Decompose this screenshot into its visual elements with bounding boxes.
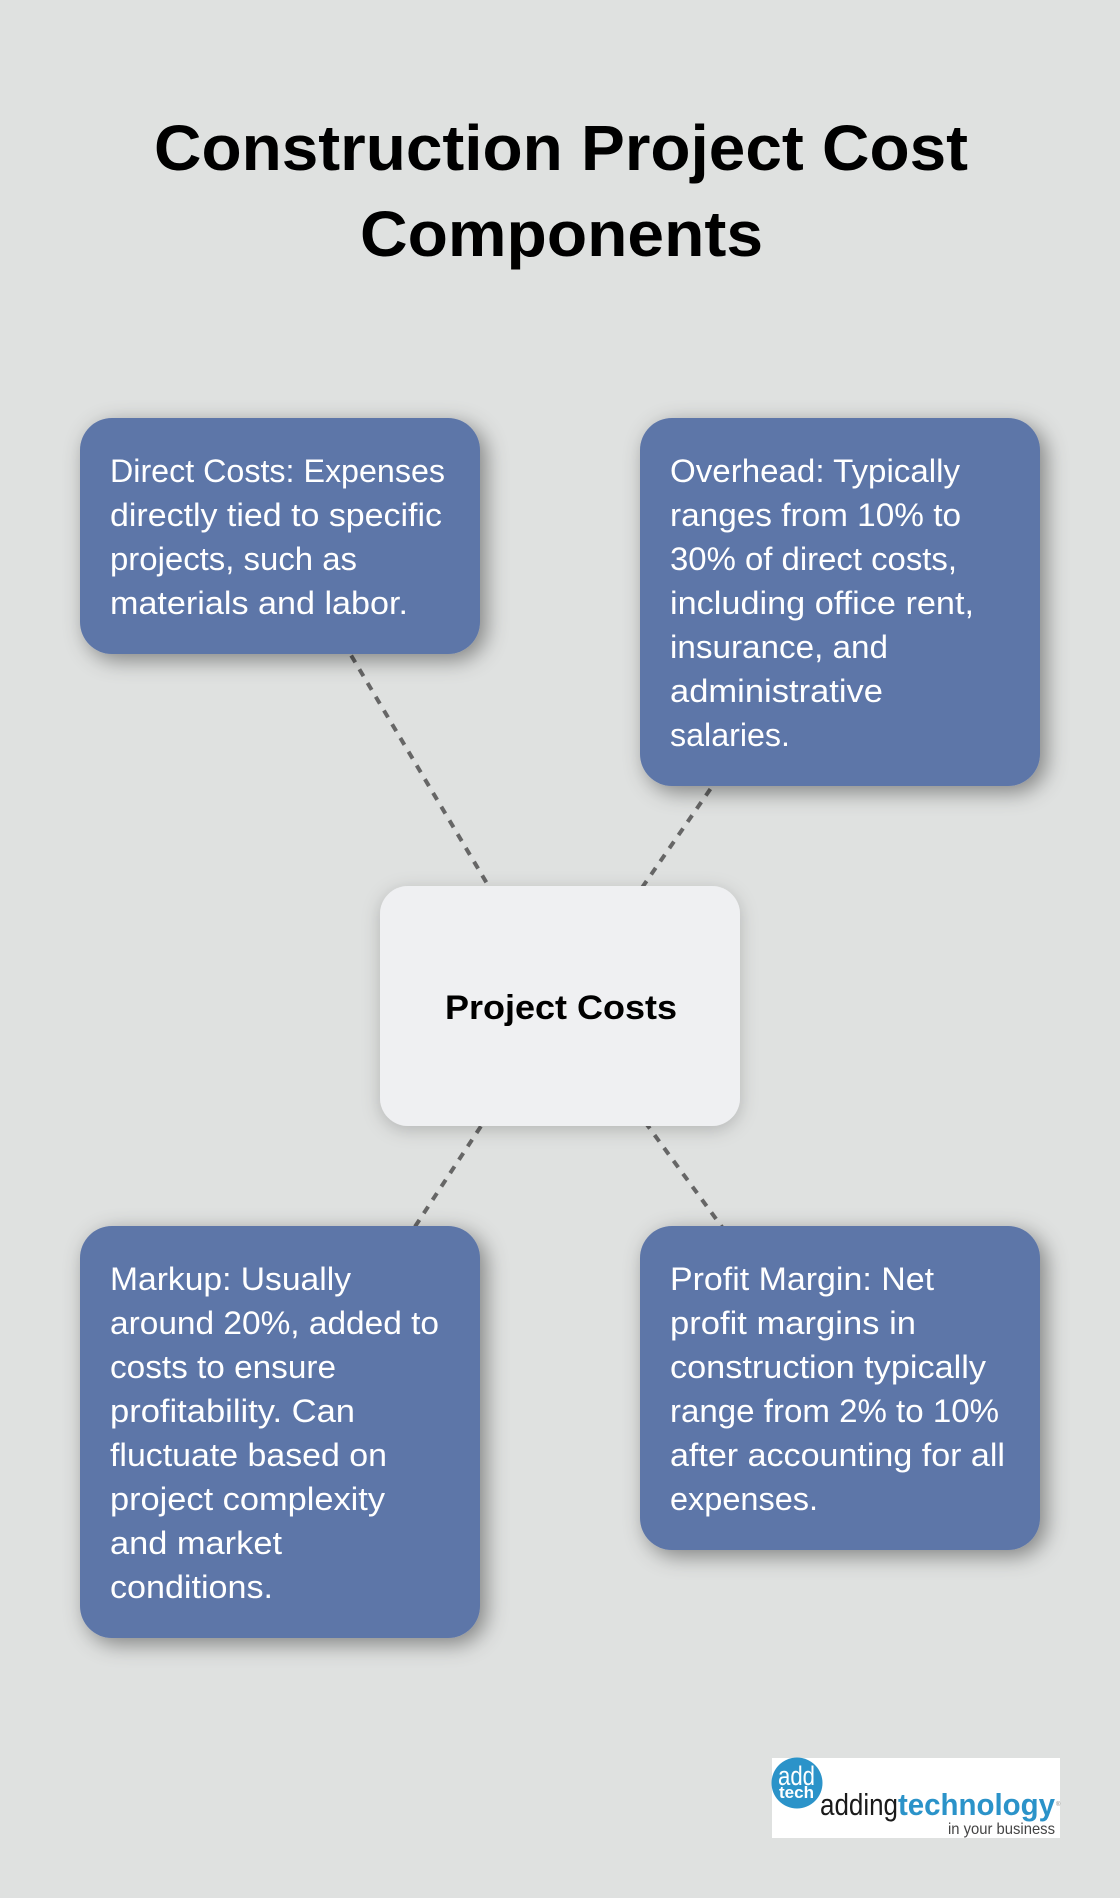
logo icon: add tech circle: add: [778, 1761, 815, 1791]
text: overhead description: salaries.: [670, 717, 790, 753]
text: overhead description: [670, 453, 974, 753]
text: direct costs description: materials and labor.: [110, 585, 408, 621]
title: Components: [360, 198, 763, 270]
logo icon: add tech circle: tech: [779, 1783, 814, 1802]
text: profit margin description: after accounting for all: [670, 1437, 1005, 1473]
panel: direct costs: [80, 418, 480, 654]
text: markup description: conditions.: [110, 1569, 273, 1605]
text: markup description: costs to ensure: [110, 1349, 336, 1385]
text: overhead description: including office rent,: [670, 585, 974, 621]
panel: overhead: [640, 418, 1040, 786]
text: markup description: Markup: Usually: [110, 1261, 351, 1297]
text: profit margin description: construction typically: [670, 1349, 986, 1385]
logo wordmark: adding: [820, 1787, 898, 1822]
text: markup description: fluctuate based on: [110, 1437, 387, 1473]
text: markup description: around 20%, added to: [110, 1305, 439, 1341]
center label: Project Costs: [445, 989, 677, 1027]
text: direct costs description: Direct Costs: Expenses: [110, 453, 445, 489]
text: overhead description: 30% of direct costs,: [670, 541, 957, 577]
panel: markup: [80, 1226, 480, 1638]
logo tagline: in your business: [948, 1821, 1055, 1838]
logo wordmark: ®: [1056, 1801, 1061, 1808]
text: direct costs description: directly tied to specific: [110, 497, 442, 533]
text: profit margin description: range from 2% to 10%: [670, 1393, 999, 1429]
logo: adding technology: [772, 1758, 1061, 1838]
logo icon: add tech circle: [772, 1758, 822, 1808]
text: overhead description: ranges from 10% to: [670, 497, 961, 533]
text: markup description: project complexity: [110, 1481, 385, 1517]
text: profit margin description: expenses.: [670, 1481, 818, 1517]
logo wordmark: [820, 1787, 1061, 1822]
text: profit margin description: Profit Margin: Net: [670, 1261, 934, 1297]
title: [154, 112, 968, 270]
connector: center to profit margin: [560, 1006, 840, 1388]
text: overhead description: Overhead: Typically: [670, 453, 960, 489]
panel: profit margin: [640, 1226, 1040, 1550]
text: profit margin description: profit margins in: [670, 1305, 916, 1341]
connector: center to overhead: [560, 602, 840, 1006]
text: direct costs description: projects, such as: [110, 541, 357, 577]
text: markup description: and market: [110, 1525, 282, 1561]
logo wordmark: technology: [898, 1787, 1056, 1822]
text: overhead description: administrative: [670, 673, 883, 709]
panel: center project costs: [380, 886, 740, 1126]
connector: center to markup: [280, 1006, 560, 1432]
text: markup description: [110, 1261, 439, 1605]
connector: center to direct costs: [280, 536, 560, 1006]
text: profit margin description: [670, 1261, 1005, 1517]
text: direct costs description: [110, 453, 445, 621]
text: overhead description: insurance, and: [670, 629, 888, 665]
title: Construction Project Cost: [154, 112, 968, 184]
text: markup description: profitability. Can: [110, 1393, 355, 1429]
